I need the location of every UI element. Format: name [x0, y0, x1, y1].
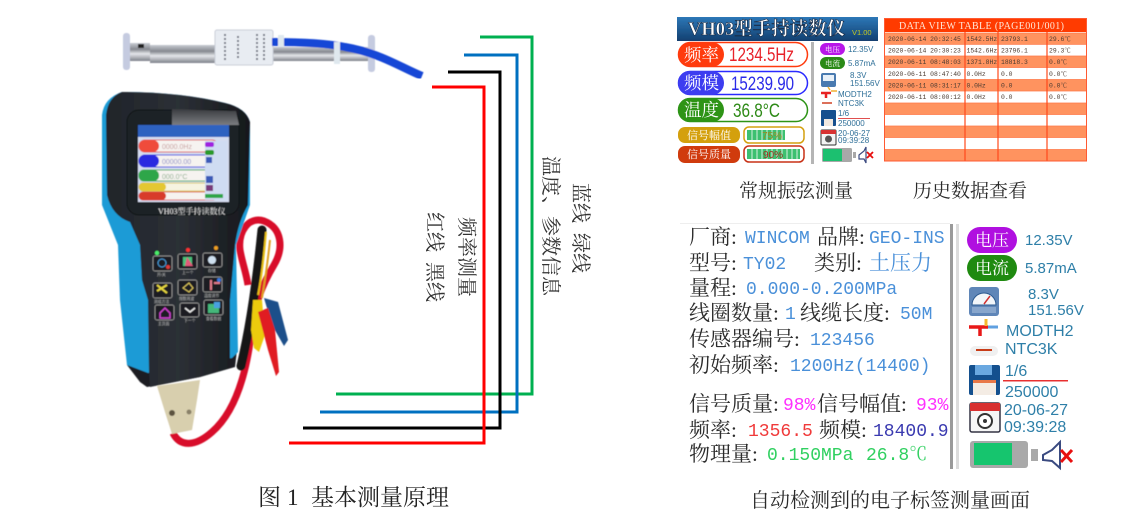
status column: 12.35V	[848, 45, 874, 54]
device screen: 000.0°C	[162, 173, 187, 181]
title bar	[677, 17, 878, 41]
figure caption: 基本测量原理	[311, 485, 449, 510]
line: range	[689, 276, 897, 300]
table title: DATA VIEW TABLE (PAGE001/001)	[899, 21, 1064, 32]
line: manufacturer and brand: 厂商:	[689, 225, 737, 249]
table data: 23796.1	[1001, 48, 1028, 54]
sensor: vibrating wire gauge with blue cable	[123, 30, 422, 76]
icon: calendar clock	[970, 403, 1000, 432]
line: coil count and cable length	[689, 301, 932, 325]
reading: frequency modulus: 15239.90	[731, 74, 794, 95]
meter readings	[1028, 286, 1084, 319]
line: model and type: 类别:	[814, 251, 862, 275]
table data: 18818.3	[1001, 59, 1028, 66]
date and time: 09:39:28	[1004, 419, 1066, 436]
status column: NTC3K	[838, 99, 865, 108]
line: signal quality and amplitude: 信号质量:	[689, 392, 779, 416]
status column: 电流	[825, 58, 840, 68]
table data: 0.0℃	[1049, 58, 1067, 66]
table data: 2020-06-11 08:48:03	[888, 59, 961, 66]
reading: frequency modulus: 频模	[684, 73, 719, 93]
voltage badge	[967, 227, 1073, 253]
line: physical quantity	[689, 442, 927, 466]
line: model and type: 型号:	[689, 251, 737, 275]
status column: 电压	[825, 44, 840, 54]
sensor model: MODTH2	[1006, 323, 1074, 340]
table title	[884, 18, 1087, 32]
line: physical quantity: 0.150MPa	[767, 446, 854, 466]
blue side grips and body	[102, 92, 250, 373]
signal amplitude bar: 75%	[762, 131, 782, 142]
icon: battery	[970, 441, 1038, 468]
panel: regular vibrating wire measurement screen	[677, 17, 880, 164]
title bar: VH03型手持读数仪	[688, 18, 846, 40]
voltage badge: 电压	[975, 231, 1009, 250]
device screen: 0000.0Hz	[162, 144, 192, 151]
reading: frequency	[678, 42, 808, 67]
storage count: 250000	[1005, 384, 1058, 401]
reading: temperature	[678, 98, 808, 122]
line: frequency and modulus: 1356.5	[748, 422, 813, 442]
line: frequency and modulus: 频率:	[689, 418, 737, 442]
table data: 0.0℃	[1049, 70, 1067, 78]
wire: red	[289, 87, 484, 443]
meter readings: 8.3V	[1028, 286, 1059, 303]
line: coil count and cable length: 1	[785, 305, 796, 325]
line: model and type: 土压力	[869, 251, 932, 275]
icon: meter	[969, 287, 999, 316]
icon: pipes	[969, 319, 998, 336]
wire: blue	[320, 55, 517, 412]
current badge: 电流	[975, 259, 1009, 278]
signal quality bar: 信号质量	[687, 147, 731, 161]
line: physical quantity: 物理量:	[689, 442, 758, 466]
table data: 2020-06-14 20:30:23	[888, 48, 961, 54]
signal quality bar: 90%	[763, 150, 783, 161]
line: initial frequency	[689, 353, 930, 377]
device screen: 00000.00	[162, 159, 191, 166]
line: coil count and cable length: 50M	[900, 305, 932, 325]
date and time	[1004, 402, 1068, 436]
line: initial frequency: 初始频率:	[689, 353, 779, 377]
storage count	[1003, 363, 1068, 401]
table data: 0.0	[1001, 82, 1013, 90]
current badge: 5.87mA	[1025, 260, 1077, 277]
device name: VH03型手持读数仪	[158, 206, 226, 216]
black face	[106, 92, 250, 387]
line: frequency and modulus	[689, 418, 949, 442]
table data: 2020-06-14 20:32:45	[888, 36, 961, 43]
line: range: 量程:	[689, 276, 737, 300]
table rows	[884, 33, 1087, 161]
line: model and type: TY02	[743, 255, 786, 275]
status column: 8.3V	[850, 71, 867, 80]
panel: status column	[950, 224, 1084, 469]
table data: 0.0Hz	[966, 71, 986, 78]
table data: 0.0℃	[1049, 82, 1067, 90]
line: signal quality and amplitude	[689, 392, 949, 416]
keypad: 存储	[208, 268, 216, 273]
panel: data view table	[884, 18, 1087, 161]
panel: electronic tag info	[680, 223, 950, 466]
figure caption: 1	[287, 485, 298, 510]
table data: 0.0	[1001, 71, 1013, 78]
line: frequency and modulus: 频模:	[819, 418, 867, 442]
table data: 2020-06-11 08:31:17	[888, 82, 961, 90]
wire: green	[336, 37, 532, 394]
table data: 1371.8Hz	[966, 59, 997, 66]
wire: black	[303, 72, 500, 428]
table data	[888, 35, 1071, 101]
voltage badge: 12.35V	[1025, 232, 1073, 249]
line: coil count and cable length: 线圈数量:	[689, 301, 779, 325]
caption: regular measurement: 常规振弦测量	[739, 180, 853, 202]
handheld readout device	[102, 92, 288, 443]
status column	[811, 42, 880, 164]
line: signal quality and amplitude: 信号幅值:	[817, 392, 907, 416]
date and time: 20-06-27	[1004, 402, 1068, 419]
table data: 0.0℃	[1049, 93, 1067, 101]
title bar: V1.00	[852, 28, 872, 37]
line: frequency and modulus: 18400.9	[873, 422, 949, 442]
line: signal quality and amplitude: 98%	[783, 396, 816, 416]
table data: 2020-06-11 08:00:12	[888, 94, 961, 101]
icon: muted speaker	[1043, 442, 1072, 468]
keypad: 主页面	[158, 321, 170, 326]
line: sensor serial	[689, 327, 875, 351]
status column: 20-06-27	[838, 129, 871, 138]
keypad: 下一个	[184, 318, 196, 323]
table data: 0.0Hz	[966, 94, 986, 101]
connector plug	[157, 380, 200, 434]
line: coil count and cable length: 线缆长度:	[800, 301, 890, 325]
reading: frequency: 频率	[684, 45, 719, 65]
table data: 1542.6Hz	[966, 48, 997, 54]
icon: thermistor	[970, 346, 998, 356]
status column: 1/6	[838, 109, 850, 118]
label: blue and green wires: 蓝线 绿线	[569, 183, 592, 273]
keypad: 开/关	[157, 272, 166, 277]
table data: 23793.1	[1001, 36, 1028, 43]
line: range: 0.000-0.200MPa	[746, 280, 897, 300]
line: manufacturer and brand: WINCOM	[745, 229, 810, 249]
figure caption: 图	[258, 485, 281, 510]
status column: 250000	[838, 119, 865, 128]
table data: 0.0Hz	[966, 82, 986, 90]
line: physical quantity: 26.8℃	[866, 446, 927, 466]
line: manufacturer and brand: GEO-INS	[869, 229, 945, 249]
line: sensor serial: 123456	[810, 331, 875, 351]
line: sensor serial: 传感器编号:	[689, 327, 800, 351]
line: initial frequency: 1200Hz(14400)	[790, 357, 930, 377]
caption: history data view: 历史数据查看	[913, 180, 1027, 202]
keypad	[153, 246, 223, 326]
line: signal quality and amplitude: 93%	[916, 396, 949, 416]
signal amplitude bar: 信号幅值	[687, 128, 731, 142]
keypad: 温度调节	[204, 293, 219, 298]
status column: MODTH2	[838, 90, 872, 99]
icon: floppy disk	[969, 365, 1000, 395]
line: manufacturer and brand	[689, 225, 945, 249]
meter readings: 151.56V	[1028, 302, 1084, 319]
table data: 29.3℃	[1049, 46, 1071, 54]
probe cables and clips	[241, 230, 288, 376]
status column: 5.87mA	[848, 59, 876, 68]
keypad: 查看数据	[206, 316, 221, 321]
line: model and type	[689, 251, 932, 275]
label: frequency measurement: 频率测量	[455, 217, 478, 297]
keypad: 上一个	[182, 270, 194, 275]
device screen	[138, 125, 229, 202]
reading: frequency: 1234.5Hz	[729, 45, 794, 66]
label: red and black wires: 红线 黑线	[423, 212, 446, 302]
reading: temperature: 温度	[684, 100, 719, 120]
keypad: 频数周波	[179, 296, 194, 301]
table data: 0.0	[1001, 94, 1013, 101]
keypad: 测组方法	[154, 299, 169, 304]
current badge	[967, 255, 1077, 281]
status column: 09:39:28	[838, 136, 870, 145]
black base	[127, 350, 237, 387]
table data: 1542.5Hz	[966, 36, 997, 43]
red signal cable	[173, 220, 280, 443]
caption: auto-detected electronic tag measurement: 自动检测到的电子标签测量画面	[750, 489, 1030, 512]
reading: temperature: 36.8°C	[733, 101, 780, 122]
label: temperature and parameter info: 温度、参数信息	[539, 156, 562, 297]
thermistor model: NTC3K	[1005, 341, 1058, 358]
status column: 151.56V	[850, 79, 880, 88]
signal amplitude bar	[678, 127, 804, 143]
table data: 2020-06-11 08:47:40	[888, 71, 961, 78]
storage count: 1/6	[1005, 363, 1027, 380]
line: manufacturer and brand: 品牌:	[817, 225, 865, 249]
signal quality bar	[678, 146, 804, 163]
table data: 29.6℃	[1049, 35, 1071, 43]
reading: frequency modulus	[678, 71, 808, 95]
